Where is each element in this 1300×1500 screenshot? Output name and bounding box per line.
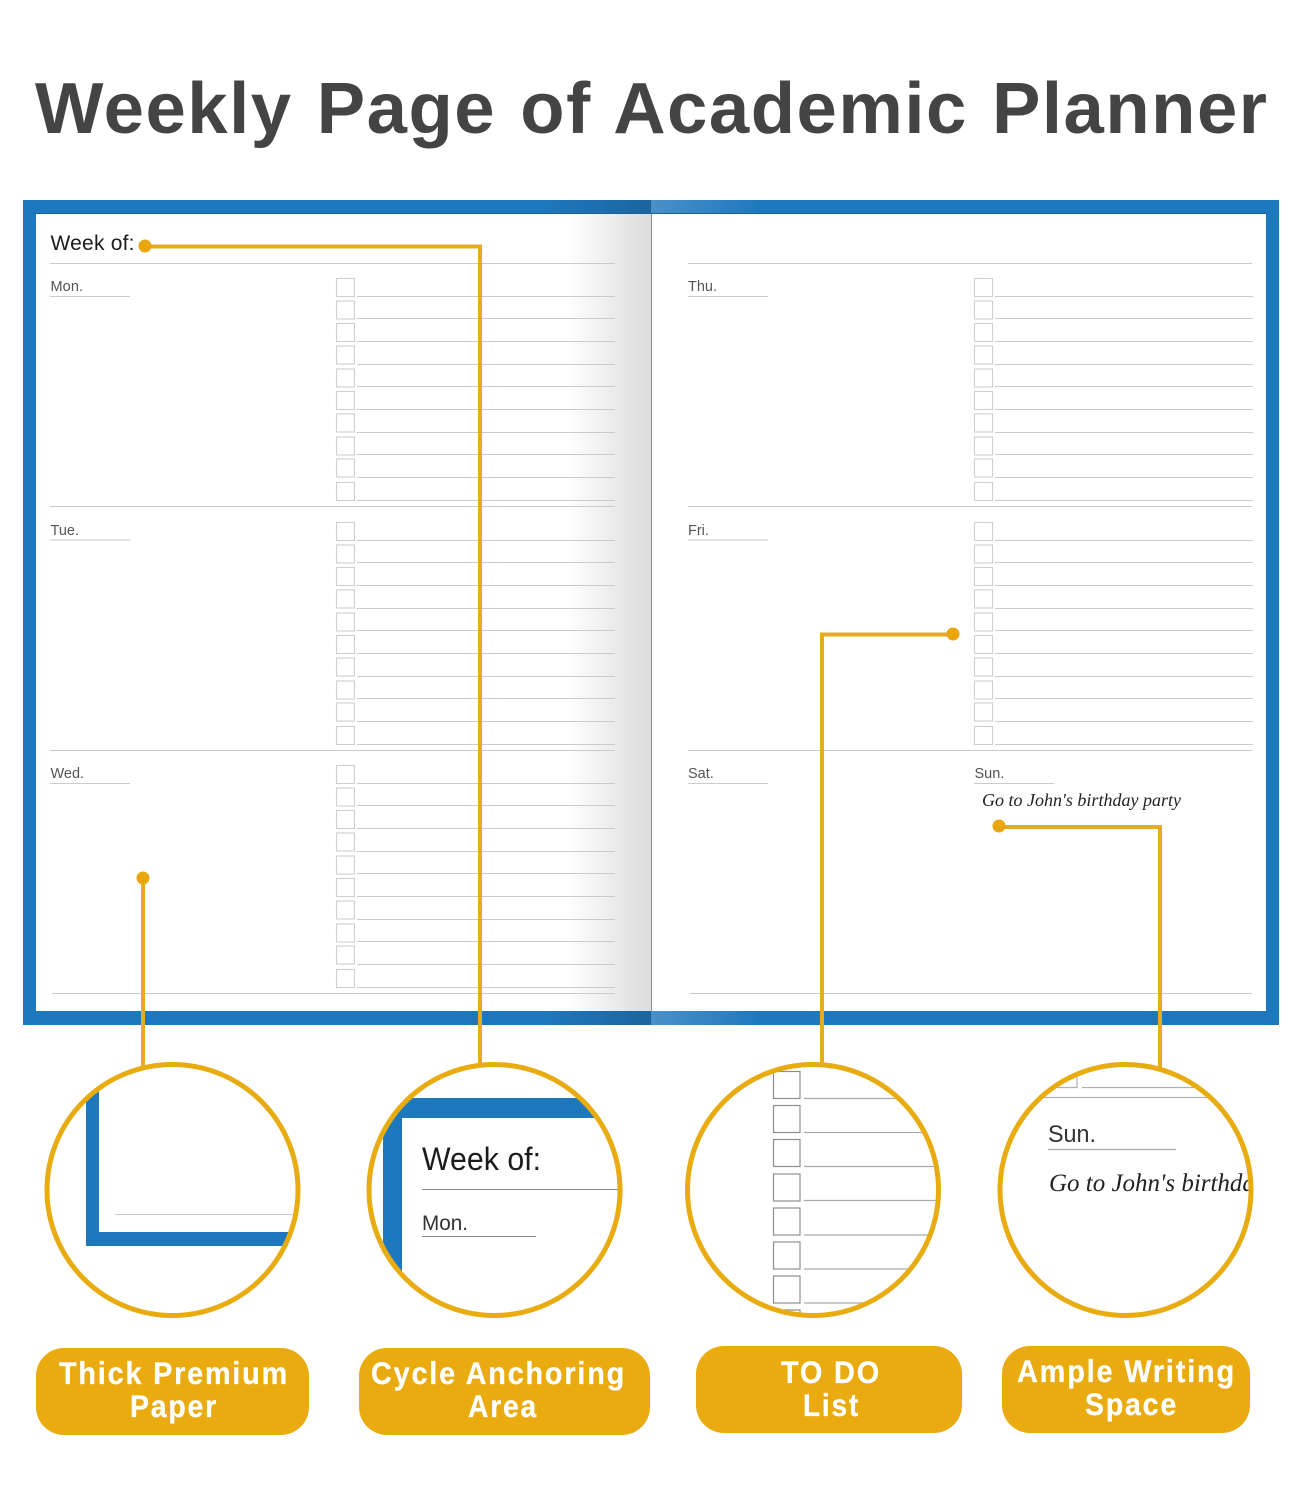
day: Monday: [50, 279, 130, 296]
day: Tuesday: Tue.: [50, 523, 79, 539]
connector: writing space circle: [992, 820, 1160, 1070]
day: Saturday: Sat.: [688, 766, 714, 782]
day: Tuesday: [50, 523, 130, 540]
day: Thursday: Thu.: [688, 279, 717, 295]
to-do list: Friday: [974, 522, 1253, 744]
to-do list: Tuesday: [336, 522, 615, 744]
magnifier: week of area: Mon.: [422, 1212, 468, 1235]
magnifier: to-do checkboxes: [688, 1064, 945, 1337]
label: Thick Premium Paper: Thick Premium: [59, 1355, 289, 1391]
label: TO DO List: [696, 1346, 962, 1433]
label: Thick Premium Paper: Paper: [130, 1388, 218, 1424]
label: Ample Writing Space: Space: [1085, 1386, 1178, 1422]
label: Thick Premium Paper: [36, 1348, 309, 1435]
label: Cycle Anchoring Area: [359, 1348, 650, 1435]
day: Thursday: [688, 279, 768, 296]
day: Wednesday: Wed.: [50, 766, 84, 782]
label: TO DO List: List: [803, 1387, 860, 1423]
connector: to-do to list circle: [822, 628, 960, 1066]
magnifier: Sunday writing space: Sun.: [1048, 1121, 1096, 1148]
day: Monday: Mon.: [50, 279, 83, 295]
magnifier: thick paper: [47, 1050, 310, 1316]
to-do list: Monday: [336, 278, 615, 500]
right page: [651, 214, 1266, 1011]
label: Cycle Anchoring Area: Area: [468, 1388, 538, 1424]
panel: open planner spread: [23, 200, 1279, 1025]
left page: [36, 214, 651, 1011]
label: Cycle Anchoring Area: Cycle Anchoring: [371, 1355, 626, 1391]
heading: week of: Week of:: [50, 232, 134, 255]
day: Sunday: Sun.: [974, 766, 1004, 782]
magnifier: Sunday writing space: [998, 1062, 1254, 1318]
day: Saturday: [688, 766, 768, 784]
magnifier: week of area: [369, 1064, 630, 1320]
day: Sunday: [974, 766, 1054, 784]
to-do list: Wednesday: [336, 766, 615, 988]
magnifier: week of area: Week of:: [422, 1141, 541, 1177]
connector: week of to cycle anchoring area: [138, 240, 480, 1066]
handwritten note: Go to John's birthday party: [982, 790, 1181, 810]
planner cover frame: [23, 200, 1279, 1025]
to-do list: Thursday: [974, 278, 1253, 500]
day: Friday: Fri.: [688, 523, 709, 539]
label: Ample Writing Space: Ample Writing: [1017, 1353, 1236, 1389]
spine line: [651, 214, 652, 1011]
day: Friday: [688, 523, 768, 540]
day: Wednesday: [50, 766, 130, 784]
label: TO DO List: TO DO: [781, 1354, 881, 1390]
connector: paper to thick premium paper: [136, 872, 150, 1068]
title: Weekly Page of Academic Planner: [35, 68, 1267, 149]
label: Ample Writing Space: [1002, 1346, 1250, 1433]
